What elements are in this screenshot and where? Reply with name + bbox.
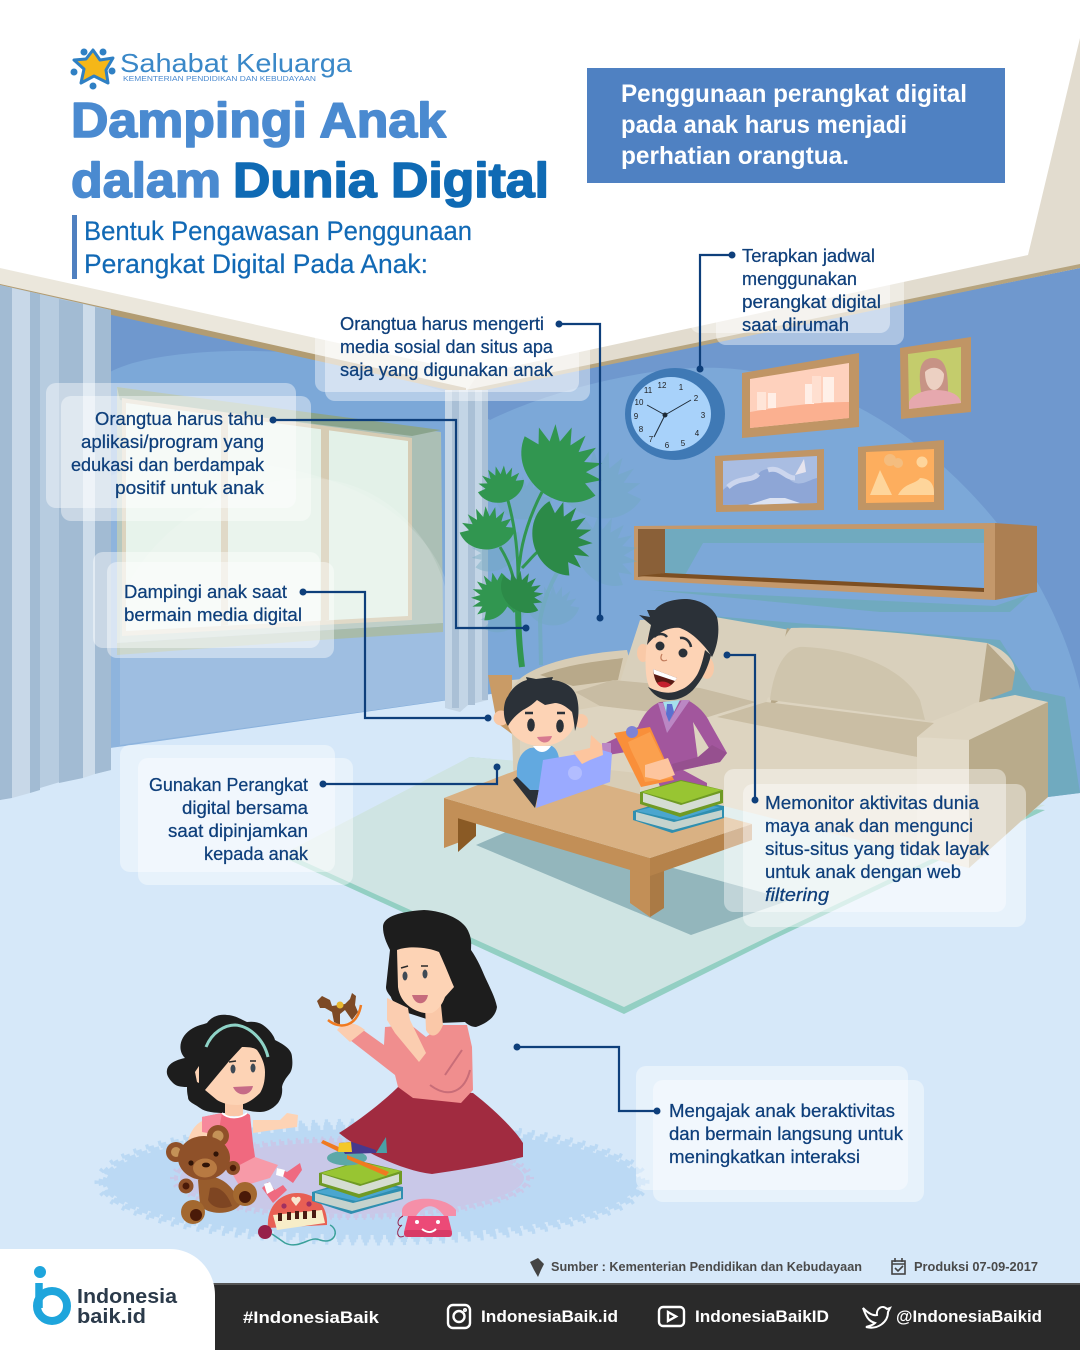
intro panel (587, 68, 1005, 183)
man (536, 599, 727, 808)
sofa (510, 615, 1080, 868)
intro panel: pada anak harus menjadi (621, 111, 907, 139)
text: memonitor: filtering (765, 884, 830, 905)
callout: gunakan (120, 745, 353, 885)
text: aplikasi: Orangtua harus tahu (95, 408, 264, 429)
text: dampingi (124, 581, 302, 625)
intro panel: perhatian orangtua. (621, 142, 849, 170)
text: gunakan (149, 774, 309, 864)
title: dalam (71, 154, 221, 208)
book stack with toy airplane (312, 1137, 403, 1214)
text: aplikasi: edukasi dan berdampak (71, 454, 265, 475)
wall (0, 268, 1080, 800)
toy piano (258, 1193, 335, 1245)
man arm (602, 727, 650, 756)
connector: jadwal to clock (696, 252, 736, 372)
girl eyes and mouth (230, 1064, 236, 1074)
wall clock: 11 (644, 386, 653, 395)
text: gunakan: saat dipinjamkan (168, 820, 308, 841)
text: memonitor (765, 792, 990, 905)
gap between arm and torso (693, 722, 712, 760)
text: jadwal: saat dirumah (742, 314, 849, 335)
footer bar (0, 1283, 1080, 1350)
subtitle: Bentuk Pengawasan Penggunaan (84, 216, 472, 246)
callout: jadwal (690, 243, 904, 345)
text: aplikasi: aplikasi/program yang (81, 431, 264, 452)
connector: memonitor (724, 652, 758, 804)
kid body (517, 746, 560, 790)
right arm (917, 695, 1048, 740)
wall clock: 3 (701, 411, 706, 420)
icon: source (530, 1258, 544, 1277)
title (71, 94, 549, 208)
callout: dampingi (93, 552, 334, 658)
wall shelf (634, 523, 1037, 612)
man shirt and tie (663, 700, 680, 722)
text: aplikasi: positif untuk anak (115, 477, 265, 498)
woman (317, 910, 523, 1174)
wall clock: 12 (658, 381, 667, 390)
icon: calendar (892, 1258, 905, 1274)
girl hair back (167, 1015, 292, 1113)
floor (0, 692, 1080, 1350)
text: jadwal (742, 245, 881, 335)
middle curtain (445, 390, 488, 712)
man forearm and hand (672, 745, 727, 772)
plant shadow on wall (460, 440, 652, 665)
wall light curve (110, 351, 1080, 800)
connector: media sosial (556, 320, 604, 622)
text: memonitor: maya anak dan mengunci (765, 815, 973, 836)
callout: memonitor (724, 769, 1026, 927)
intro panel: Penggunaan perangkat digital (621, 80, 967, 108)
wall clock: 9 (634, 412, 639, 421)
text: media sosial (340, 313, 554, 380)
toy telephone (398, 1199, 456, 1237)
left arm (510, 650, 640, 800)
girl skirt (230, 1157, 278, 1187)
girl headband (206, 1025, 268, 1057)
wall clock (625, 368, 725, 460)
seats (575, 680, 756, 718)
kid with laptop (494, 677, 588, 808)
text: media sosial: saja yang digunakan anak (340, 359, 554, 380)
kid face (507, 692, 575, 746)
callout: mengajak (636, 1066, 924, 1202)
source line: Produksi 07-09-2017 (914, 1259, 1038, 1274)
girl ear (195, 1066, 199, 1083)
man ears (637, 644, 649, 662)
text: aplikasi (71, 408, 265, 498)
round shag rug (97, 1121, 647, 1243)
connector: mengajak (514, 1044, 660, 1114)
icon: twitter (863, 1307, 890, 1328)
text: jadwal: Terapkan jadwal (742, 245, 875, 266)
title: Dunia Digital (233, 154, 549, 208)
girl feet (262, 1163, 302, 1203)
text: memonitor: untuk anak dengan web (765, 861, 961, 882)
right cushion back (766, 628, 1015, 722)
logo: Sahabat Keluarga (70, 48, 353, 90)
woman face (397, 947, 454, 1013)
icon: instagram (448, 1305, 470, 1328)
text: media sosial: Orangtua harus mengerti (340, 313, 544, 334)
man mouth (653, 669, 677, 687)
wall clock: 8 (639, 425, 644, 434)
logo tab: Indonesia baik.id: Indonesia (77, 1286, 178, 1308)
logo: Sahabat Keluarga: KEMENTERIAN PENDIDIKAN DAN KEBUDAYAAN (123, 74, 316, 83)
callout: aplikasi (46, 383, 311, 521)
clipboard (614, 727, 674, 787)
picture frame: sea waves (715, 449, 824, 512)
logo: Sahabat Keluarga: Sahabat Keluarga (120, 48, 353, 78)
man eyes (656, 642, 664, 650)
sofa base (512, 670, 1048, 868)
text: mengajak: meningkatkan interaksi (669, 1146, 860, 1167)
large translucent light arcs (0, 460, 446, 800)
girl socks (264, 1168, 285, 1194)
plant (458, 406, 621, 667)
logo tab: Indonesia baik.id: baik.id (77, 1306, 146, 1328)
area rug under table (285, 757, 1045, 1014)
wall clock: 1 (679, 383, 684, 392)
kid hair (504, 677, 578, 731)
text: memonitor: situs-situs yang tidak layak (765, 838, 990, 859)
subtitle: Perangkat Digital Pada Anak: (84, 249, 428, 279)
woman skirt (339, 1087, 523, 1174)
man body (638, 700, 727, 792)
ceiling cornice left (0, 268, 478, 392)
icon: ib mark (34, 1266, 67, 1321)
kid legs (513, 770, 540, 808)
text: mengajak (669, 1100, 904, 1167)
footer bar: IndonesiaBaik.id (481, 1307, 618, 1326)
icon: youtube (659, 1307, 684, 1326)
text: dampingi: Dampingi anak saat (124, 581, 287, 602)
connector: aplikasi (270, 416, 530, 632)
sofa wall shadow (700, 615, 1080, 800)
text: mengajak: Mengajak anak beraktivitas (669, 1100, 895, 1121)
connector: dampingi (300, 588, 492, 722)
wall clock: 6 (665, 441, 670, 450)
text: mengajak: dan bermain langsung untuk (669, 1123, 904, 1144)
wall clock: 2 (694, 394, 699, 403)
icon: star (70, 48, 116, 90)
woman eyes and mouth (402, 972, 408, 980)
left curtain (0, 285, 111, 800)
wall clock: 4 (695, 429, 700, 438)
plant pot (488, 675, 512, 734)
girl neck (225, 1100, 243, 1116)
title: Dampingi Anak (71, 94, 447, 148)
text: memonitor: Memonitor aktivitas dunia (765, 792, 980, 813)
ceiling cornice right and corner column (466, 38, 1080, 392)
footer bar: @IndonesiaBaikid (896, 1307, 1042, 1326)
rocking horse toy (317, 993, 361, 1025)
logo tab: Indonesia baik.id (0, 1249, 215, 1350)
window (117, 387, 443, 655)
text: dampingi: bermain media digital (124, 604, 302, 625)
text: gunakan: kepada anak (204, 843, 309, 864)
woman hair back (383, 910, 497, 1027)
kid eyes and mouth (527, 718, 535, 732)
subtitle (72, 215, 472, 279)
footer bar: #IndonesiaBaik (243, 1308, 380, 1327)
picture frame: portrait (900, 337, 971, 419)
woman sweater (350, 1025, 473, 1103)
teddy bear (166, 1125, 257, 1224)
left cushion back (620, 617, 790, 715)
connector: gunakan (320, 764, 500, 788)
picture frame: landscape (858, 440, 944, 510)
laptop (536, 750, 612, 808)
girl face (205, 1047, 265, 1105)
wall clock: 10 (635, 398, 644, 407)
woman sweater fold (430, 1050, 470, 1092)
girl (166, 1015, 302, 1224)
text: gunakan: Gunakan Perangkat (149, 774, 308, 795)
text: jadwal: menggunakan (742, 268, 857, 289)
wall clock: 5 (681, 439, 686, 448)
text: jadwal: perangkat digital (742, 291, 881, 312)
source line: Sumber : Kementerian Pendidikan dan Kebudayaan (551, 1259, 862, 1274)
footer bar: IndonesiaBaikID (695, 1307, 829, 1326)
text: media sosial: media sosial dan situs apa (340, 336, 554, 357)
coffee table (444, 765, 752, 917)
woman neck (425, 1005, 443, 1035)
man face (646, 625, 706, 695)
books on table (633, 780, 724, 833)
girl dress (202, 1113, 255, 1170)
source line (530, 1258, 1038, 1277)
callout: media sosial (315, 310, 590, 401)
woman raised hands (337, 998, 426, 1062)
man hair (639, 599, 718, 657)
man beard (648, 650, 711, 700)
wall clock: 7 (649, 435, 654, 444)
kid ears (494, 710, 508, 726)
girl arms (188, 1113, 298, 1145)
man hand (573, 735, 603, 764)
picture frame: city (742, 353, 859, 438)
text: gunakan: digital bersama (182, 797, 309, 818)
